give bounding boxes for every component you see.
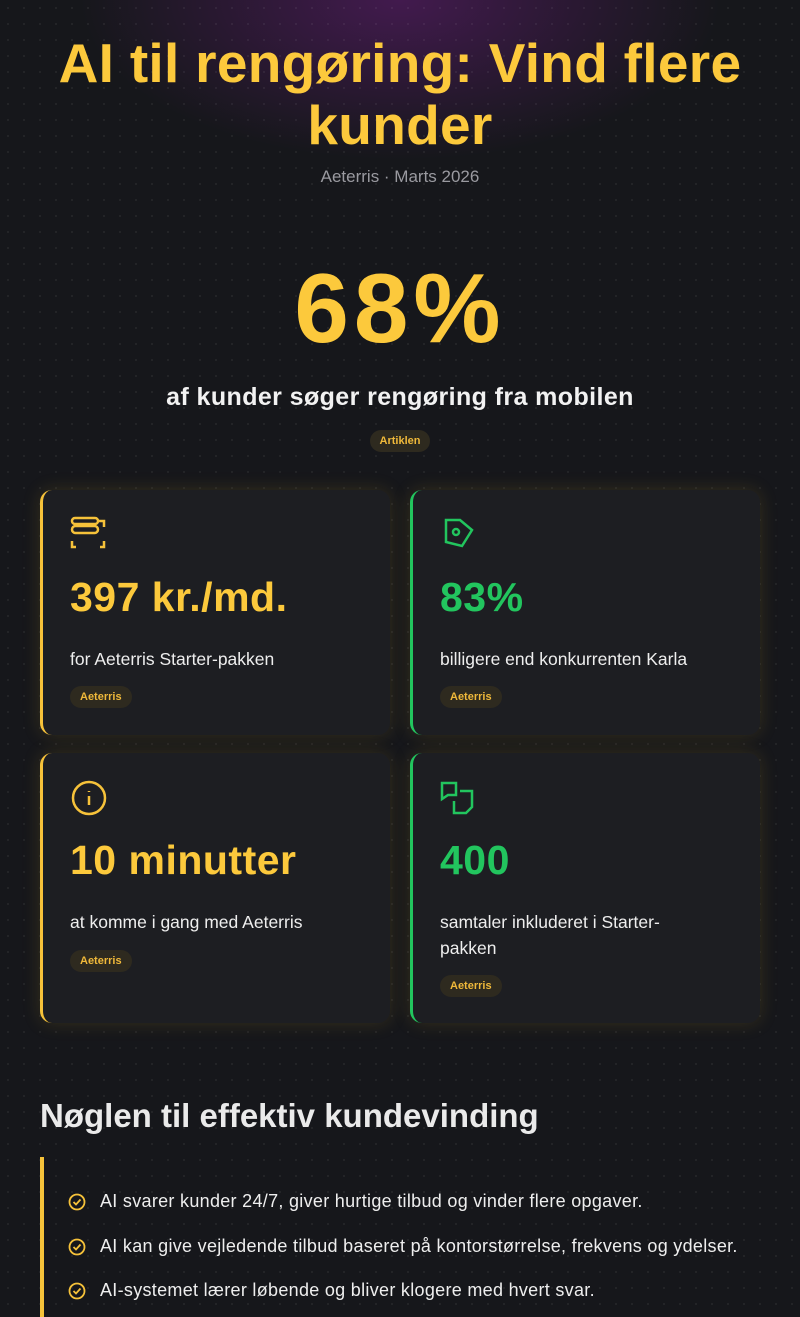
key points list — [40, 1157, 760, 1317]
icon: info — [72, 780, 106, 816]
title — [59, 32, 741, 156]
card: time: Aeterris — [80, 955, 122, 967]
key points list: AI kan give vejledende tilbud baseret på kontorstørrelse, frekvens og ydelser. — [100, 1236, 738, 1256]
card: cheaper: Aeterris — [450, 691, 492, 703]
section heading: Nøglen til effektiv kundevinding — [40, 1097, 539, 1134]
icon: chat — [440, 782, 474, 814]
card: conversations: 400 — [440, 837, 510, 883]
card: cheaper: 83% — [440, 574, 524, 620]
card: conversations: samtaler inkluderet i Starter-pakken — [440, 912, 660, 958]
icon: tag — [444, 518, 474, 548]
icon: stack — [70, 516, 106, 548]
card: time: at komme i gang med Aeterris — [70, 912, 302, 932]
key points list: AI svarer kunder 24/7, giver hurtige tilbud og vinder flere opgaver. — [100, 1191, 643, 1211]
card: time — [40, 753, 390, 1023]
card: conversations — [410, 753, 760, 1023]
hero stat: 68% — [294, 253, 506, 363]
card: price: 397 kr./md. — [70, 574, 287, 620]
card: cheaper — [410, 490, 760, 735]
hero caption: af kunder søger rengøring fra mobilen — [166, 383, 634, 411]
title: kunder — [307, 94, 493, 156]
card: cheaper: billigere end konkurrenten Karla — [440, 649, 687, 669]
card: conversations: Aeterris — [450, 980, 492, 992]
card: price — [40, 490, 390, 735]
subtitle: Aeterris · Marts 2026 — [321, 167, 479, 186]
source pill: Artiklen — [380, 435, 420, 447]
title: AI til rengøring: Vind flere — [59, 32, 741, 94]
card: time: 10 minutter — [70, 837, 296, 883]
card: price: Aeterris — [80, 691, 122, 703]
card: price: for Aeterris Starter-pakken — [70, 649, 274, 669]
key points list: AI-systemet lærer løbende og bliver klogere med hvert svar. — [100, 1280, 595, 1300]
